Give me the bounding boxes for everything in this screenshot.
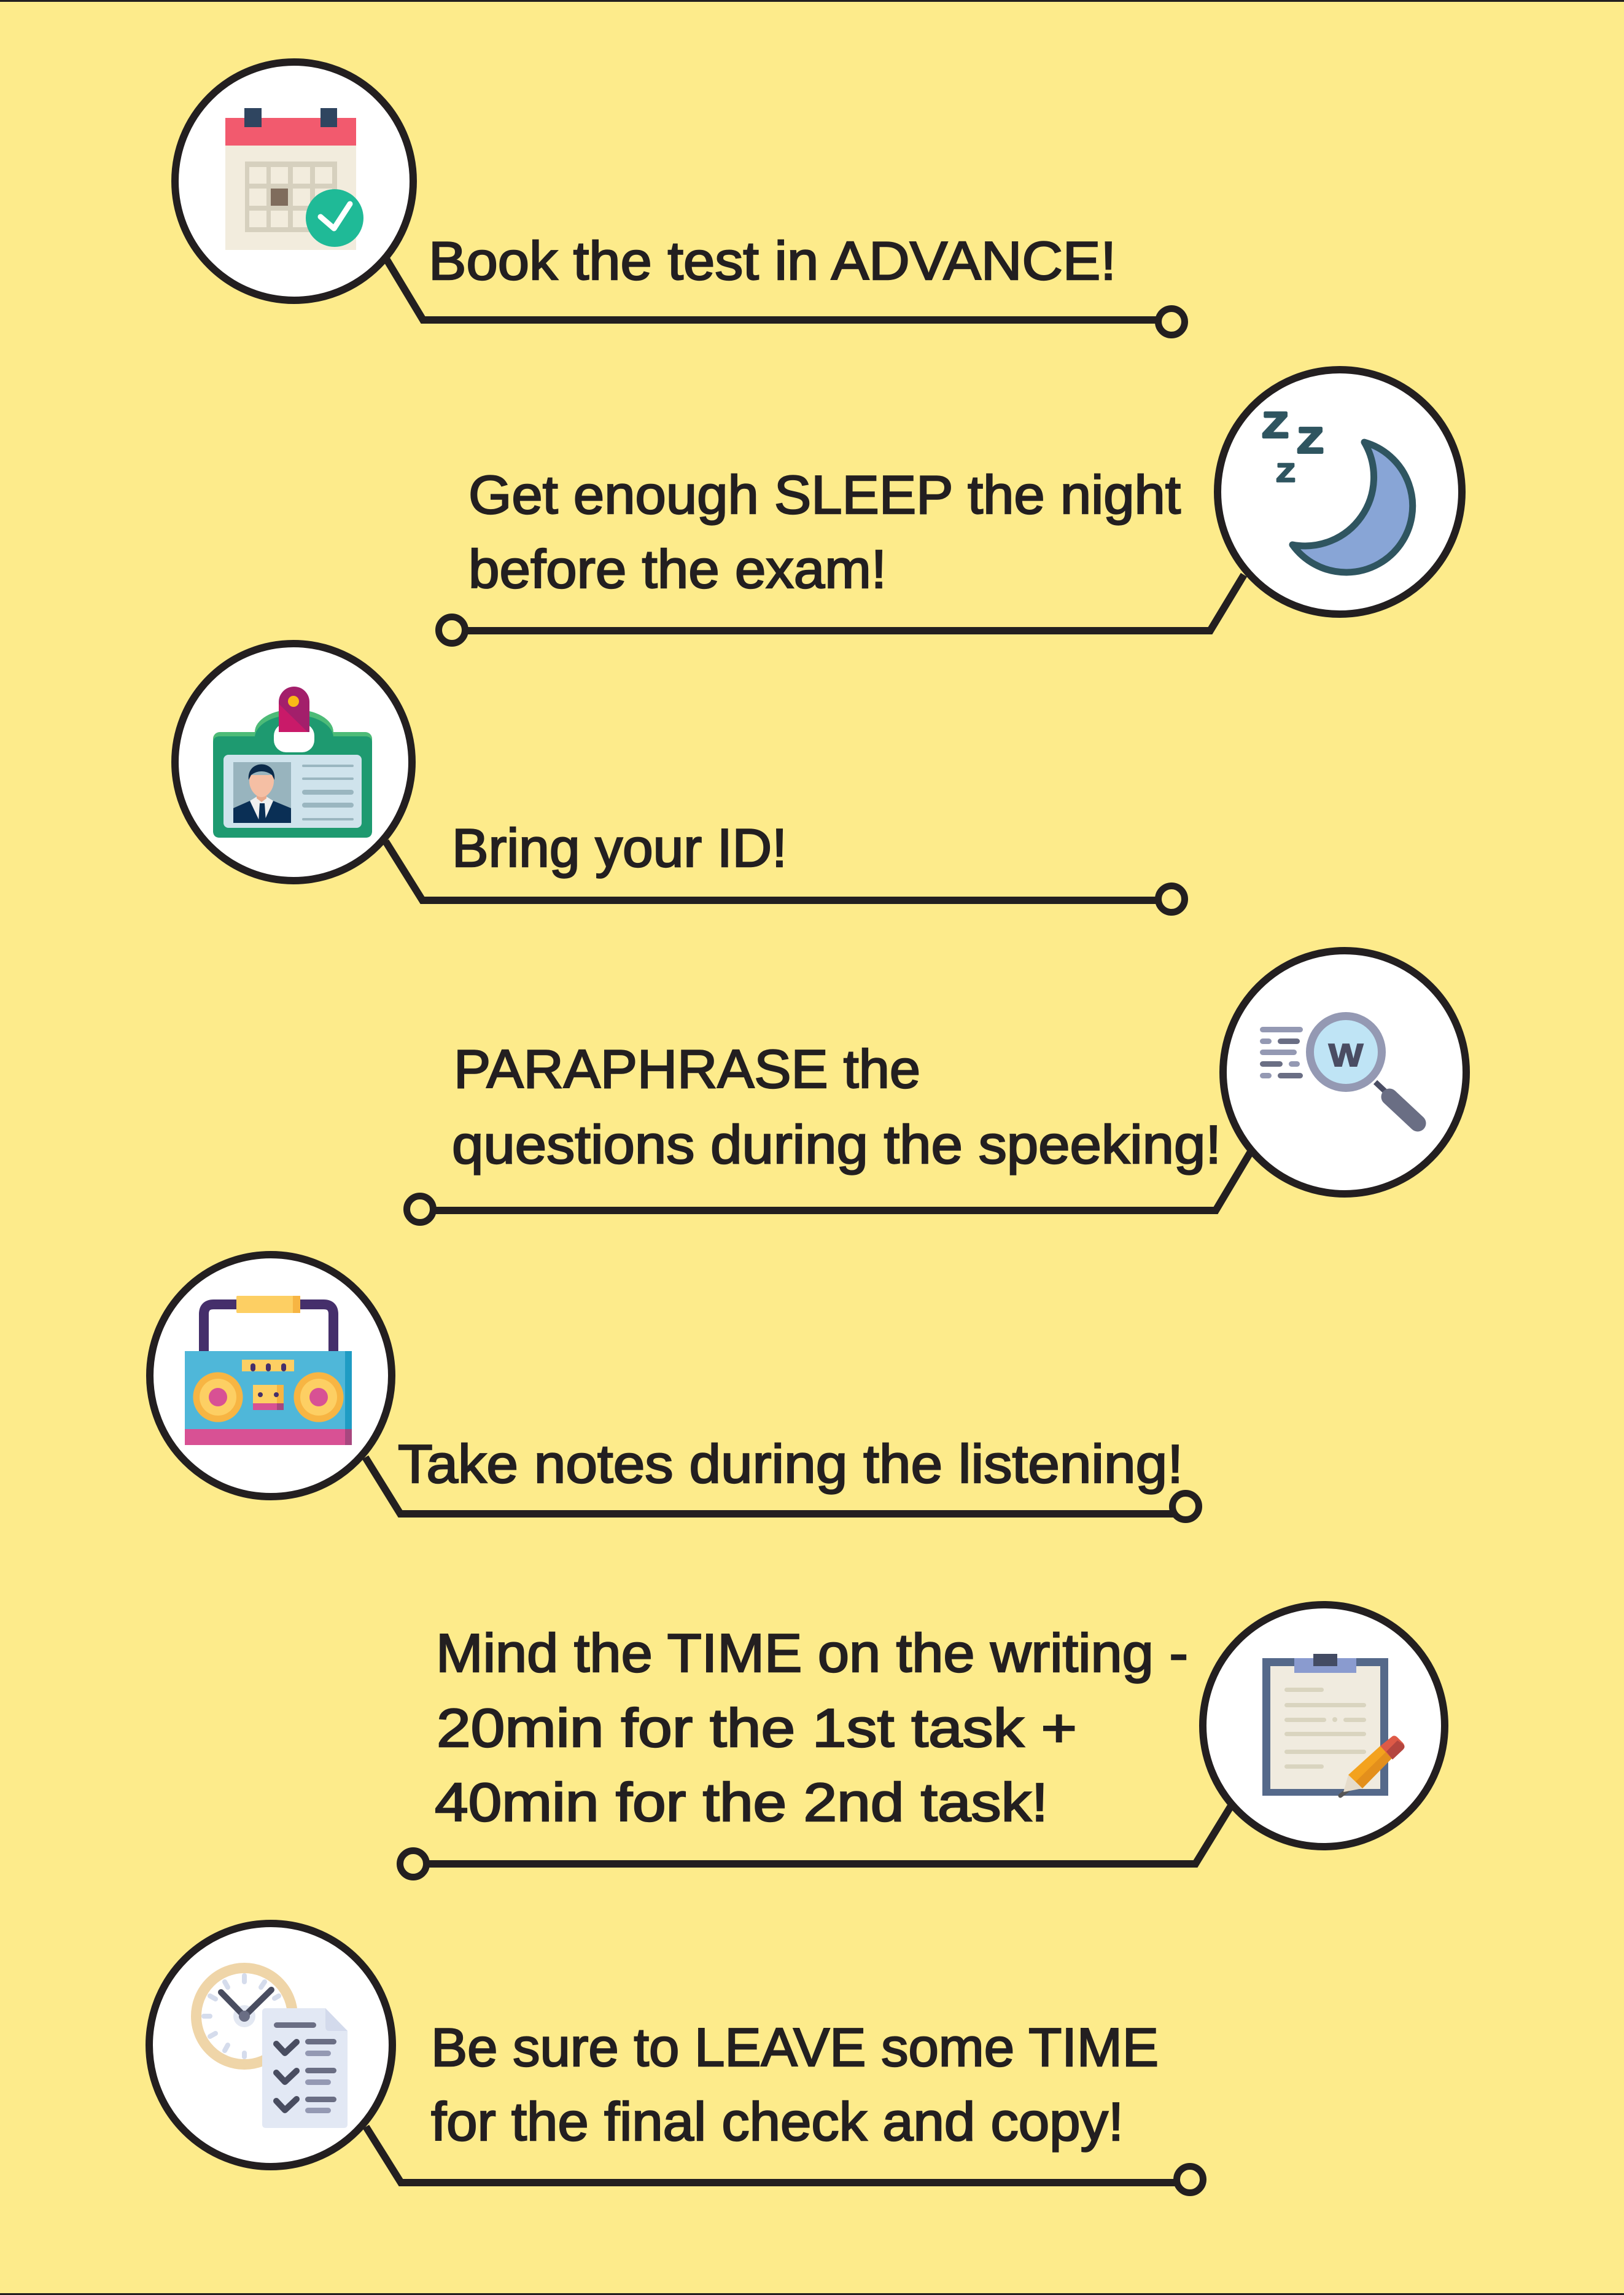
text: mind the time: 20min for the 1st task + [437, 1697, 1077, 1758]
end dot 6 [400, 1851, 426, 1877]
icon: moon and zzz [1262, 405, 1413, 572]
icon: moon and zzz: Z [1276, 458, 1295, 487]
text: paraphrase: PARAPHRASE the [454, 1038, 920, 1099]
circle 2 [1218, 370, 1462, 614]
end dot 2 [438, 617, 465, 644]
connector line 1 [387, 260, 1160, 320]
icon: radio [185, 1296, 352, 1445]
panel: book the test [175, 62, 1185, 335]
end dot 7 [1176, 2167, 1203, 2192]
text: leave time: for the final check and copy! [431, 2091, 1124, 2152]
text: sleep: Get enough SLEEP the night [468, 464, 1181, 525]
text: sleep [468, 464, 1181, 599]
connector line 2 [462, 575, 1244, 631]
panel: paraphrase [406, 951, 1466, 1222]
icon: ID badge [213, 687, 372, 838]
icon: calendar [225, 108, 363, 250]
circle 5 [150, 1255, 392, 1497]
icon: moon and zzz: Z [1262, 405, 1288, 445]
connector line 5 [365, 1457, 1176, 1514]
connector line 4 [430, 1153, 1250, 1210]
text: paraphrase: questions during the speeking! [452, 1114, 1221, 1175]
text: mind the time [435, 1623, 1188, 1833]
panel: leave time [149, 1923, 1203, 2192]
end dot 3 [1158, 886, 1185, 913]
icon: magnifying glass [1260, 1016, 1418, 1123]
panel: bring ID [175, 644, 1185, 913]
circle 1 [175, 62, 413, 300]
circle 4 [1223, 951, 1466, 1194]
text: bring ID: Bring your ID! [452, 817, 787, 878]
text: sleep: before the exam! [468, 539, 887, 599]
icon: clock and checklist [196, 1968, 348, 2128]
circle 6 [1203, 1605, 1445, 1847]
end dot 1 [1158, 308, 1185, 335]
circle 3 [175, 644, 412, 881]
panel: take notes [150, 1255, 1199, 1519]
icon: magnifying glass: W [1329, 1038, 1364, 1073]
end dot 4 [406, 1196, 433, 1222]
connector line 3 [386, 841, 1160, 900]
icon: moon and zzz: Z [1297, 421, 1323, 461]
text: book the test: Book the test in ADVANCE! [429, 230, 1116, 291]
text: mind the time: 40min for the 2nd task! [435, 1772, 1048, 1833]
panel: mind the time [400, 1605, 1445, 1877]
panel: sleep [438, 370, 1462, 644]
circle 7 [149, 1923, 392, 2167]
icon: clipboard and pencil [1262, 1654, 1405, 1796]
text: take notes: Take notes during the listening! [398, 1433, 1183, 1494]
text: paraphrase [452, 1038, 1221, 1175]
connector line 6 [422, 1807, 1230, 1864]
connector line 7 [366, 2127, 1180, 2183]
text: leave time: Be sure to LEAVE some TIME [431, 2017, 1159, 2078]
end dot 5 [1173, 1494, 1199, 1519]
text: mind the time: Mind the TIME on the writing - [436, 1623, 1188, 1683]
text: leave time [431, 2017, 1159, 2152]
